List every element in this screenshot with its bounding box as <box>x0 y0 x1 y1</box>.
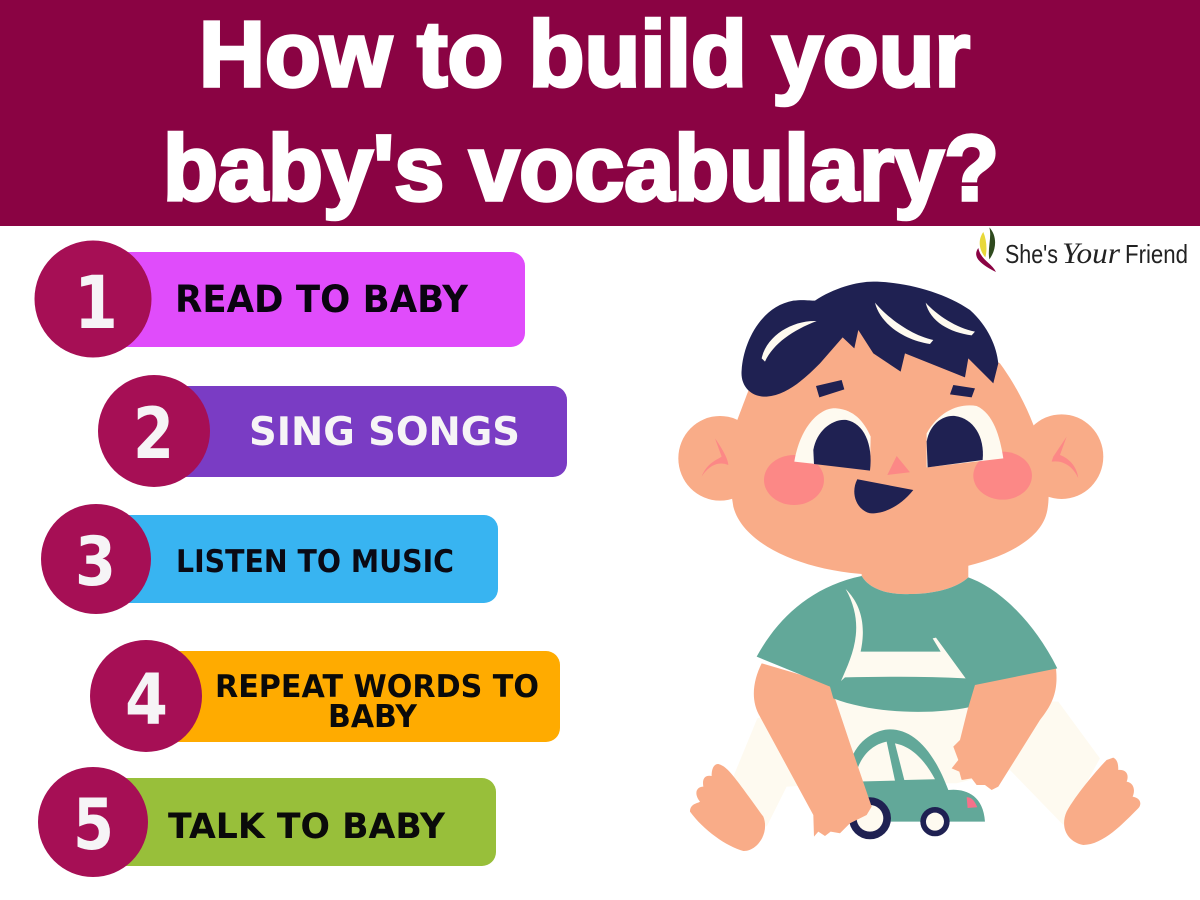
number 1: 1 <box>74 261 118 346</box>
left ear <box>678 416 762 501</box>
logo leaf mark <box>976 227 996 272</box>
mouth <box>854 479 913 513</box>
label 4 line 1: REPEAT WORDS TO <box>215 669 539 705</box>
logo script word: Your <box>1062 237 1120 270</box>
label 5: TALK TO BABY <box>168 807 446 847</box>
item 4: repeat words to baby <box>90 640 560 752</box>
logo wordmark: She's <box>1005 239 1058 269</box>
illustration: baby with toy car <box>678 282 1140 851</box>
number 2: 2 <box>133 393 174 475</box>
item 1: read to baby <box>34 240 525 358</box>
baby body <box>690 563 1140 851</box>
baby head <box>678 282 1103 575</box>
label 4 line 2: BABY <box>328 699 418 735</box>
face <box>731 293 1049 575</box>
title line 1: How to build your <box>199 2 970 106</box>
item 2: sing songs <box>98 375 567 487</box>
legs and torso <box>733 697 1100 827</box>
right eye <box>927 405 1003 467</box>
neck <box>862 563 968 594</box>
title banner <box>0 0 1200 226</box>
number 3: 3 <box>75 523 116 602</box>
item 3: listen to music <box>41 504 498 614</box>
left foot <box>690 764 765 851</box>
left arm <box>754 663 872 837</box>
number 4: 4 <box>125 659 168 741</box>
shirt stripe <box>841 589 966 681</box>
label 2: SING SONGS <box>249 410 520 455</box>
shirt <box>757 576 1057 712</box>
toy car <box>848 729 985 839</box>
eyebrows <box>816 380 975 397</box>
title line 2: baby's vocabulary? <box>163 116 999 220</box>
label 1: READ TO BABY <box>175 278 469 321</box>
logo wordmark: Friend <box>1125 239 1188 269</box>
nose <box>887 456 910 475</box>
right arm <box>952 668 1057 790</box>
label 3: LISTEN TO MUSIC <box>176 544 454 580</box>
number 5: 5 <box>73 784 114 866</box>
right foot <box>1064 758 1140 845</box>
logo: She's Your Friend <box>976 227 1188 272</box>
item 5: talk to baby <box>38 767 496 877</box>
hair <box>741 282 998 397</box>
left eye <box>794 408 871 471</box>
hair highlights <box>762 303 975 362</box>
cheeks <box>764 452 1032 505</box>
right ear <box>1020 414 1103 499</box>
